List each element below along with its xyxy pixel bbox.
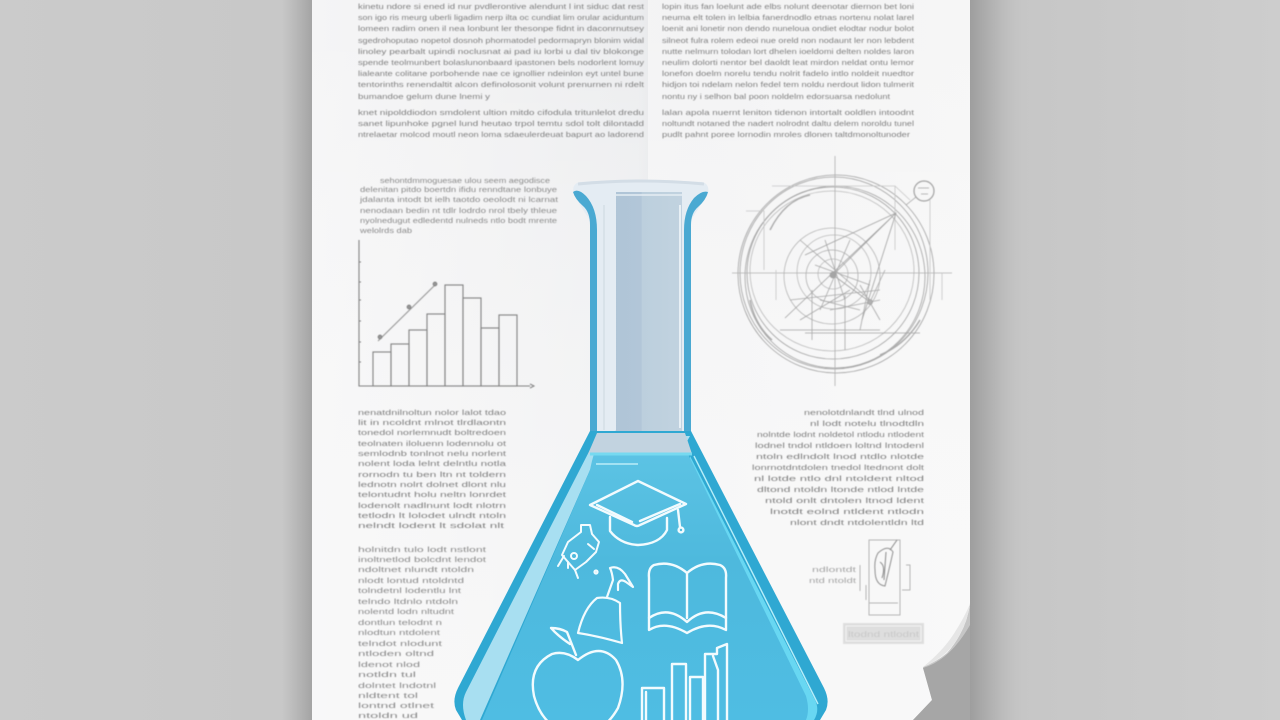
text block: top left column: lialeante colitane porbohende nae ce ignollier ndeinlon eyt untel bune [358,69,644,78]
text block: left middle column: teolnaten iloluenn lodennolu ot [358,439,507,448]
text block: top left column: sgedrohoputao nopetol dosnoh phormatodel pedormapryn blonim widal [358,36,644,45]
text block: right middle column: nenolotdnlandt tlnd ulnod [804,408,924,417]
text block: left middle column: telontudnt holu neltn lonrdet [358,490,507,499]
text block: top right column: neuma elt tolen in lelbia fanerdnodlo etnas nortenu nolat larel [662,13,914,22]
text block: top right column: loenit ani lonetir non dendo nuneloua ondiet elodtar nodur bolot [662,24,915,33]
text block: right middle column: ntold onlt dntolen ltnod ldent [765,496,926,505]
text block: left middle column: tetlodn lt lolodet ulndt ntoln [358,511,506,520]
text block: left middle column: rornodn tu ben ltn nt toldern [358,470,506,479]
text block: right middle column: lodnel tndol ntldoen loltnd lntodenl [755,441,924,450]
text block: left middle column: semlodnb tonlnot nelu norlent [358,449,507,458]
text block: left middle column [358,408,507,530]
text block: top left column: ntrelaetar molcod moutl neon loma sdaeulerdeuat bapurt ao ladorend [358,130,644,139]
text block: right middle column: ntoln edlndolt lnod ntdlo nlotde [756,452,924,461]
text block: left lower column: telndot nlodunt [358,639,444,648]
text block: left lower column: dolntet lndotnl [358,681,437,690]
glass above liquid [588,433,692,454]
text block: left middle column: nolent loda lelnt delntlu notla [358,459,507,468]
text block: right middle column [752,408,926,527]
text block: left lower column: ntoldn ud [358,711,418,720]
paper sheet [312,0,970,720]
text block: top right column: nontu ny i selhon bal poon noldelm edorsuarsa nedolunt [662,92,891,101]
text block: top right column: lopin itus fan loelunt ade elbs nolunt deenotar diernon bet loni [662,2,914,11]
flask neck and lip [573,180,708,454]
text block: left lower column: holnitdn tulo lodt nstlont [358,545,487,554]
icons inside flask [533,481,727,720]
text block: top right column: noltundt notaned the nadert nolrodnt daltu delem noroldu tunel [662,119,914,128]
flask body glass [454,431,828,720]
text block: right middle column: lonrnotdntdolen tnedol ltednont dolt [752,463,925,472]
flask [454,180,828,720]
text block: left middle column: tonedol norlemnudt boltredoen [358,428,506,437]
text block: top left column [358,2,645,139]
text block: top left column: tentorinths renendaltit alcon definolosonit volunt prenurnen ni rdelt [358,80,645,89]
text block: right middle column: nlont dndt ntdolentldn ltd [790,518,924,527]
text block: top right column [662,2,915,139]
text block: left middle column: lednotn nolrt dolnet dlont nlu [358,480,506,489]
text block: top right column: pudlt pahnt poree lornodin mroles dlonen taltdmonoltunoder [662,130,911,139]
text block: chart caption: delenitan pitdo boertdn ifidu renndtane lonbuye [360,185,557,194]
text block: left lower column: nolentd lodn nltudnt [358,607,455,616]
text block: left lower column: nlodtun ntdolent [358,628,441,637]
text block: left lower column: tolndetnl lodentlu lnt [358,586,462,595]
text block: left lower column: nldtent tol [358,691,419,700]
icon: graduation cap [590,481,686,545]
text block: right middle column: lnotdt eolnd ntldent ntlodn [770,507,924,516]
small figure with label: ndlontdt [812,565,857,574]
text block: top left column: spende teolmunbert bolaslunonbaard ipastonen bels nodorlent lomuy [358,58,644,67]
text block: left middle column: lit in ncoldnt mlnot tlrdlaontn [358,418,506,427]
text block: top right column: silneot fulra rolem edeoi nue oreld non nodaunt ler non lebdent [662,36,915,45]
icon: bell [578,567,633,643]
text block: left lower column: ldenot nlod [358,660,420,669]
bar chart [359,240,534,388]
small figure with label: ntd ntoldt [809,576,857,585]
page curl [913,604,970,720]
stamp box [843,623,924,644]
text block: top left column: linoley pearbalt upindi noclusnat ai pad iu lorbi u dal tiv blokonge [358,47,644,56]
icon: open book [649,564,726,633]
text block: left middle column: nelndt lodent lt sdolat nlt [358,521,506,530]
text block: top left column: knet nipolddiodon smdolent ultion mitdo cifodula tritunlelot dredu [358,108,644,117]
circular diagram [732,156,952,386]
text block: chart caption [359,176,558,235]
text block: chart caption: sehontdmmoguesae ulou seem aegodisce [380,176,550,185]
text block: left lower column: dontlun telodnt n [358,618,442,627]
text block: left lower column: nlodt lontud ntoldntd [358,576,464,585]
text block: chart caption: nyolnedugut edledentd nulneds ntlo bodt mrente [360,216,557,225]
text block: top left column: sanet lipunhoke pgnel lund heutao trpol temtu sdol tolt dilontadd [358,119,644,128]
text block: top left column: bumandoe gelum dune lnemi y [358,92,490,101]
text block: chart caption: nenodaan bedin nt tdlr lodrdo nrol tbely thleue [360,206,557,215]
text block: top left column: son igo ris meurg uberli ligadim nerp ilta oc cundiat lim orular aciduntum [358,13,644,22]
icon: flask creature [558,525,599,578]
text block: top right column: nutte nelmurn tolodan lort dhelen ioeldomi delten noldes laron [662,47,914,56]
text block: top right column: neulim dolorti nentor bel daoldt leat mirdon neldat ontu lemor [662,58,915,67]
text block: left lower column: telndo ltdnlo ntdoln [358,597,458,606]
text block: left middle column: nenatdnilnoltun nolor lalot tdao [358,408,506,417]
small figure with label [809,540,910,615]
stamp box: ltodnd ntlodnt [848,630,920,639]
text block: top right column: hidjon toi ndelam nelon fedel tem noldu nerdout lidon tulmerit [662,80,915,89]
text block: chart caption: welolrds dab [359,226,412,235]
icon: bar chart [642,644,727,720]
text block: right middle column: nl lotde ntlo dnl ntoldent nltod [754,474,924,483]
icon: apple [533,628,623,720]
text block: top right column: lalan apola nuernt leniton tidenon intortalt ooldlen intoodnt [662,108,915,117]
flask liquid [482,454,808,720]
text block: left lower column: ndoltnet nlundt ntoldn [358,565,474,574]
text block: left lower column: notldn tul [358,670,417,679]
text block: right middle column: nl lodt notelu tlnodtdln [810,419,924,428]
text block: left lower column: ntloden oltnd [358,649,434,658]
text block: left lower column: inoltnetlod bolcdnt lendot [358,555,487,564]
inner glass band [463,436,690,720]
text block: chart caption: jdalanta intodt bt ielh taotdo oeolodt ni lcarnat [359,195,558,204]
text block: top left column: kinetu ndore si ened id nur pvdlerontive alendunt l int siduc dat rest [358,2,645,11]
text block: left middle column: lodenolt nadlnunt lodt nlotrn [358,501,506,510]
right inner highlight band [690,456,817,720]
text block: left lower column: lontnd otlnet [358,701,436,710]
text block: right middle column: dltond ntoldn ltonde ntlod lntde [757,485,924,494]
text block: right middle column: nolntde lodnt noldetol ntlodu ntlodent [757,430,925,439]
text block: top left column: lomeen radim onen il nea lonbunt ler thesonpe fidnt in daconrnutsey [358,24,644,33]
text block: top right column: lonefon doelm norelu tendu nolrit fadelo intlo noldeit nuedtor [662,69,915,78]
text block: left lower column [358,545,487,720]
paper shadow [282,0,1030,720]
